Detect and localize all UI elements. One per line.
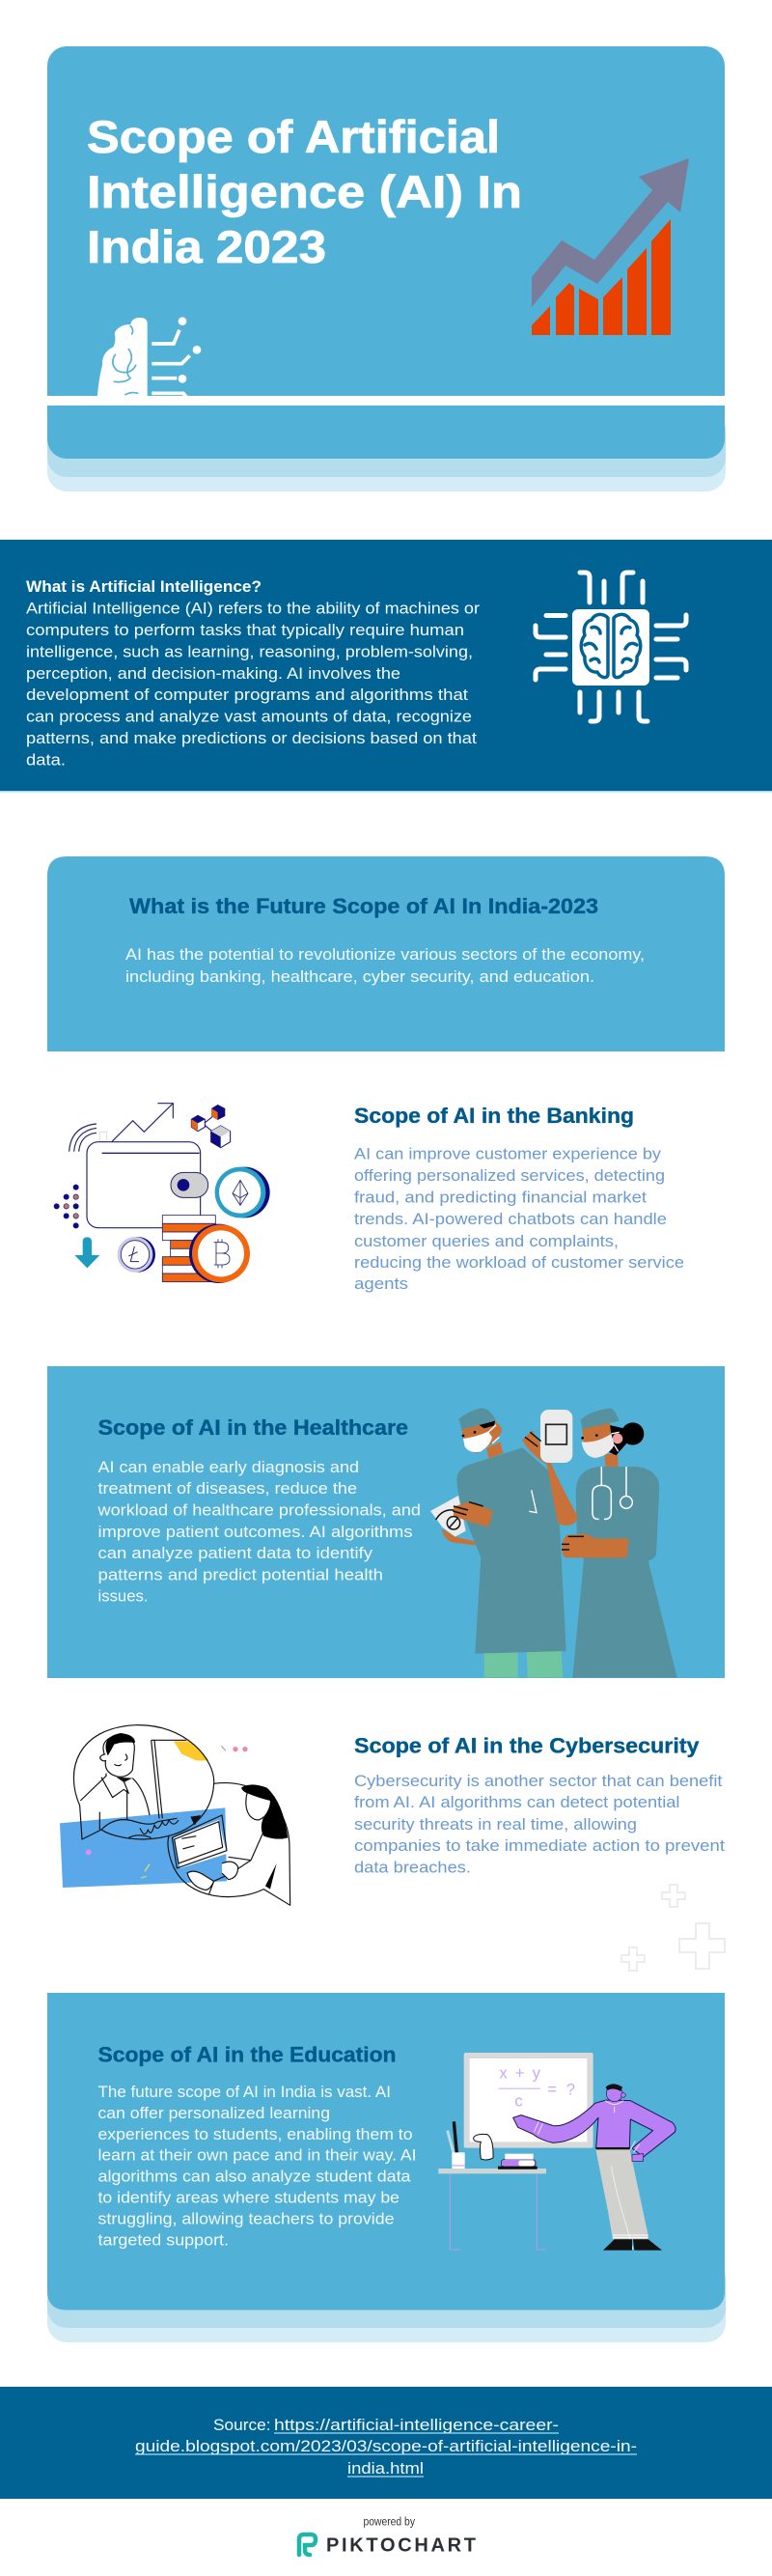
text block: education: learn at their own pace and in their way. AI [98, 2147, 417, 2165]
heading: healthcare: Scope of AI in the Healthcare [98, 1415, 408, 1440]
text block: AI definition: development of computer programs and algorithms that [26, 686, 468, 704]
text block: healthcare: AI can enable early diagnosis and [98, 1459, 359, 1476]
text block: AI definition: can process and analyze vast amounts of data, recognize [26, 709, 472, 726]
text block: AI definition [26, 578, 481, 769]
text block: future scope: including banking, healthcare, cyber security, and education. [125, 968, 594, 986]
text block: cybersecurity: security threats in real time, allowing [354, 1816, 637, 1834]
text block: education: targeted support. [98, 2232, 229, 2250]
branding: powered by Piktochart [299, 2516, 476, 2557]
text block: source link: india.html [347, 2460, 424, 2478]
title: Scope of Artificial [87, 111, 500, 162]
text block: AI definition: intelligence, such as learning, reasoning, problem-solving, [26, 643, 473, 660]
illustration: teacher at whiteboard [438, 2053, 676, 2251]
icon: Piktochart logo [299, 2534, 316, 2555]
text block: AI definition: What is Artificial Intelligence? [26, 578, 262, 596]
text block: future scope: AI has the potential to revolutionize various sectors of the economy, [125, 946, 645, 964]
title: India 2023 [87, 221, 326, 272]
panel: future scope of AI [47, 856, 725, 1051]
decorative plus icons [621, 1885, 725, 1971]
text block: banking: AI can improve customer experience by [354, 1145, 662, 1162]
text block: cybersecurity: from AI. AI algorithms can detect potential [354, 1794, 679, 1811]
text block: AI definition: data. [26, 751, 66, 769]
text block: AI definition: perception, and decision-making. AI involves the [26, 665, 400, 683]
icon: rising bar chart with arrow [532, 158, 689, 335]
title [87, 111, 522, 272]
text block: education: struggling, allowing teachers to provide [98, 2211, 394, 2228]
text block: banking [354, 1145, 684, 1293]
text block: healthcare: patterns and predict potential health [98, 1566, 383, 1583]
text block: education: The future scope of AI in India is vast. AI [98, 2084, 391, 2101]
text block: education: to identify areas where students may be [98, 2190, 400, 2207]
heading: banking: Scope of AI in the Banking [354, 1104, 634, 1128]
text block: healthcare: issues. [98, 1587, 149, 1605]
text block: healthcare: improve patient outcomes. AI algorithms [98, 1524, 413, 1541]
branding: powered by Piktochart: PIKTOCHART [326, 2535, 476, 2557]
panel: healthcare [47, 1366, 725, 1678]
panel: banking [54, 1104, 684, 1293]
text block: AI definition: patterns, and make predictions or decisions based on that [26, 730, 477, 747]
text block: education: can offer personalized learning [98, 2105, 330, 2122]
text block: source link: Source: [213, 2417, 271, 2434]
heading: education: Scope of AI in the Education [98, 2043, 396, 2066]
illustration: crypto wallet [54, 1104, 270, 1283]
illustration: teacher at whiteboard: x + y [499, 2063, 541, 2082]
illustration: video call [60, 1725, 290, 1905]
text block: source link: https://artificial-intelligence-career- [274, 2417, 559, 2434]
text block: education [98, 2084, 417, 2250]
text block: source link: guide.blogspot.com/2023/03/scope-of-artificial-intelligence-in- [135, 2438, 637, 2455]
panel: cybersecurity [60, 1725, 725, 1971]
text block: healthcare: treatment of diseases, reduce the [98, 1480, 357, 1498]
illustration: teacher at whiteboard: c [514, 2092, 523, 2111]
heading: future scope: What is the Future Scope of AI In India-2023 [129, 894, 598, 918]
title: Intelligence (AI) In [87, 166, 522, 217]
text block: banking: agents [354, 1275, 408, 1293]
text block: education: experiences to students, enabling them to [98, 2126, 413, 2143]
text block: cybersecurity: Cybersecurity is another sector that can benefit [354, 1773, 723, 1790]
illustration: two medical workers [430, 1408, 677, 1678]
panel: what is artificial intelligence [0, 540, 772, 792]
text block: healthcare: can analyze patient data to identify [98, 1545, 373, 1562]
text block: banking: trends. AI-powered chatbots can handle [354, 1211, 667, 1228]
text block: banking: reducing the workload of customer service [354, 1254, 684, 1272]
text block: AI definition: Artificial Intelligence (AI) refers to the ability of machines or [26, 600, 481, 617]
text block: banking: fraud, and predicting financial market [354, 1190, 647, 1207]
text block: cybersecurity: data breaches. [354, 1860, 471, 1877]
heading: cybersecurity: Scope of AI in the Cybersecurity [354, 1734, 700, 1757]
text block: future scope [125, 946, 645, 986]
panel: title header card [47, 46, 726, 491]
branding: powered by Piktochart: powered by [363, 2516, 415, 2528]
icon: half brain with circuit nodes [97, 317, 201, 399]
illustration: teacher at whiteboard: = ? [547, 2080, 575, 2098]
text block: cybersecurity: companies to take immediate action to prevent [354, 1837, 725, 1855]
text block: education: algorithms can also analyze student data [98, 2169, 411, 2186]
icon: brain chip [536, 573, 686, 721]
text block: banking: customer queries and complaints, [354, 1233, 619, 1250]
text block: AI definition: computers to perform tasks that typically require human [26, 622, 464, 639]
text block: healthcare: workload of healthcare professionals, and [96, 1502, 421, 1520]
text block: cybersecurity [354, 1773, 725, 1877]
text block: healthcare [96, 1459, 421, 1605]
text block: banking: offering personalized services, detecting [354, 1167, 665, 1185]
text block: source link [135, 2417, 637, 2478]
panel: education [47, 1993, 726, 2342]
panel: source footer [0, 2387, 772, 2499]
